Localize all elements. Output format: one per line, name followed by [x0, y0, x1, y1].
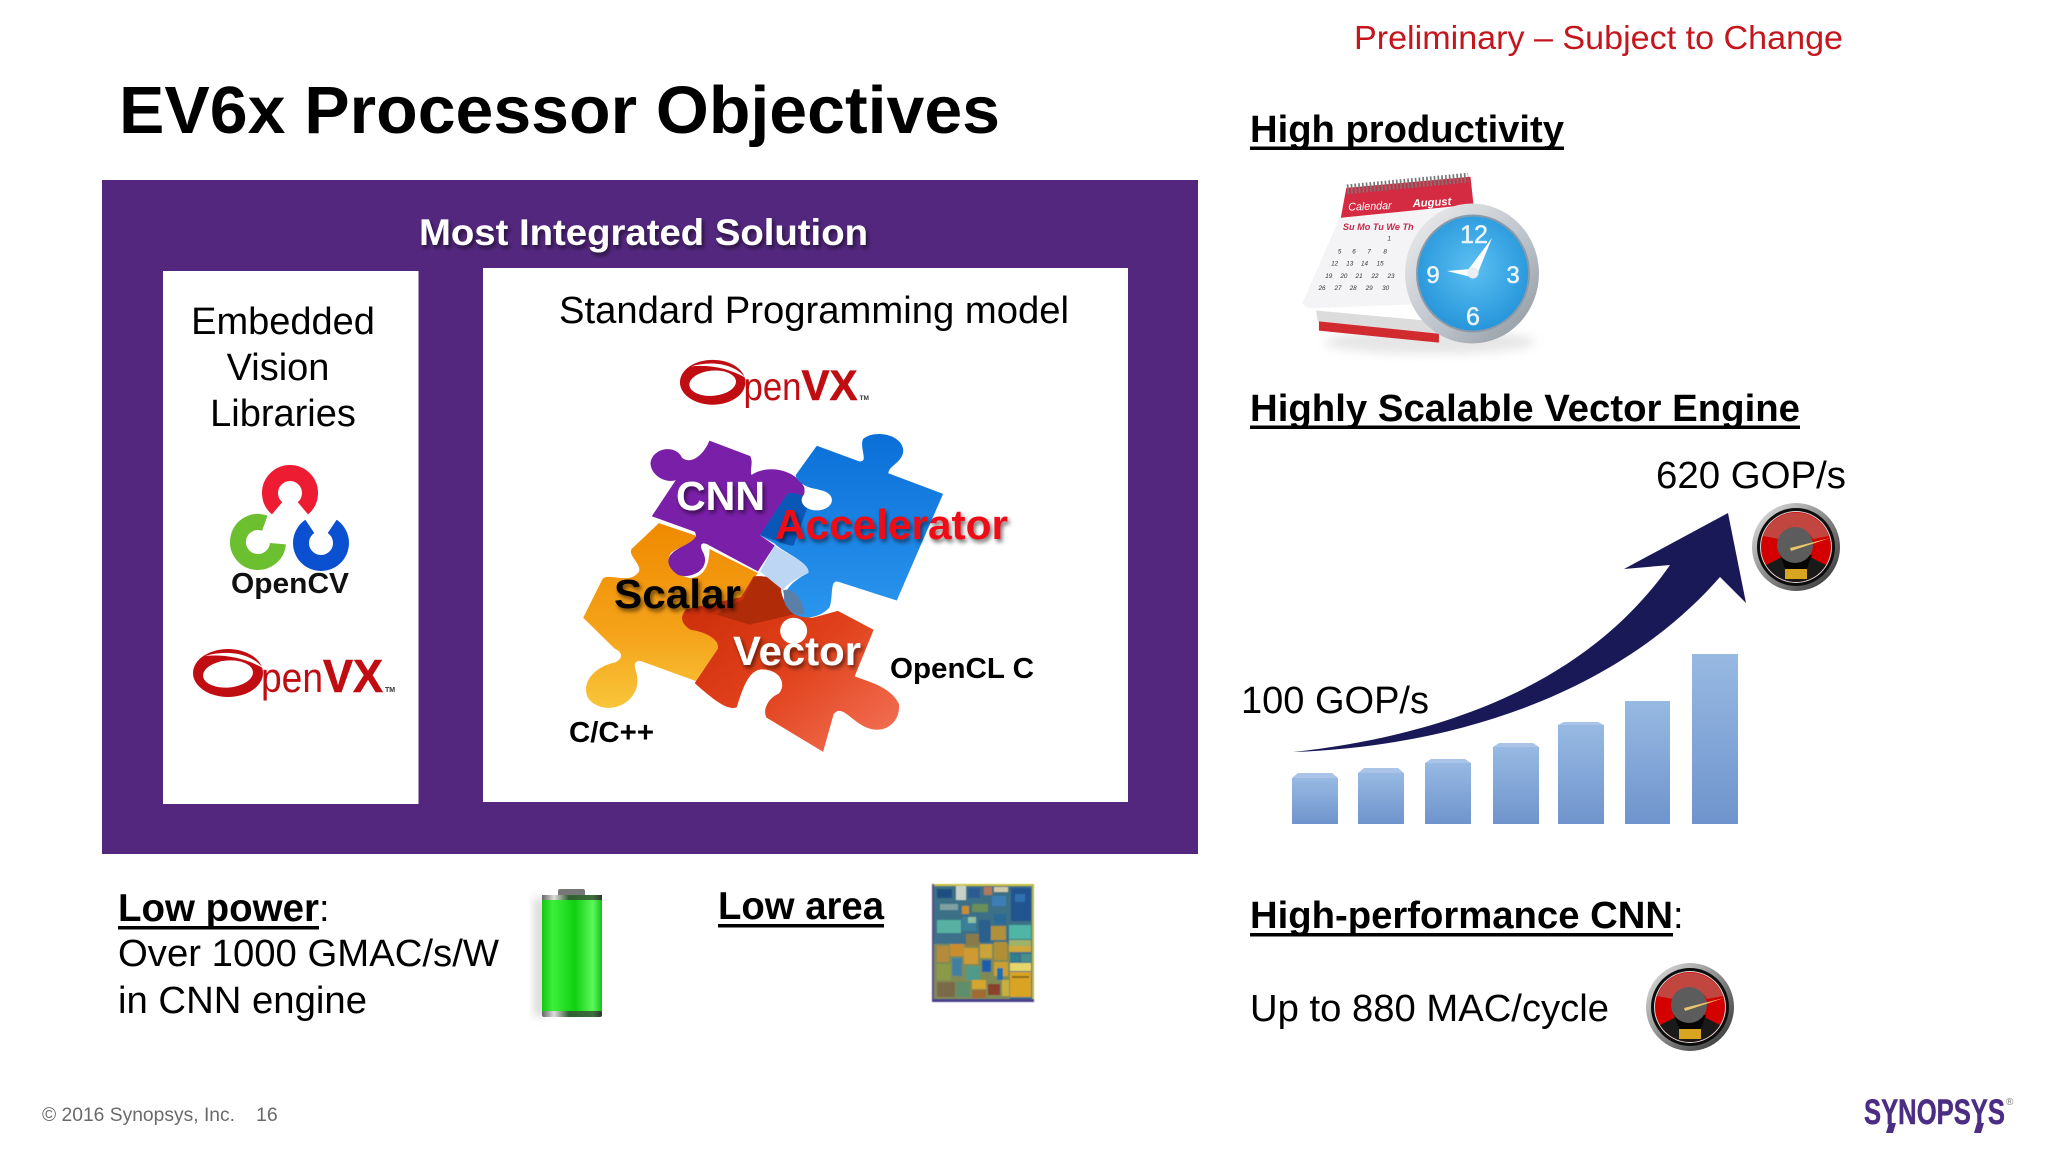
icon: calendar and clock: 29	[1365, 285, 1373, 292]
notice: preliminary: Preliminary – Subject to Change	[1354, 20, 1843, 57]
footer: copyright and page number: © 2016 Synopsys, Inc.	[42, 1104, 235, 1126]
puzzle piece: scalar	[583, 523, 758, 708]
icon: calendar and clock: 23	[1387, 273, 1395, 280]
panel: standard programming model	[483, 268, 1128, 802]
logo: OpenVX: TM	[385, 687, 395, 694]
label: 620 GOP/s: 620 GOP/s	[1656, 455, 1846, 497]
icon: calendar and clock: 8	[1383, 248, 1387, 256]
logo: OpenVX: VX	[802, 362, 858, 410]
text block: low power: Over 1000 GMAC/s/W	[118, 933, 499, 975]
text block: low power: :	[319, 888, 330, 930]
icon: calendar and clock	[1302, 177, 1539, 354]
label: C/C++: C/C++	[569, 717, 654, 749]
libraries heading: Embedded	[191, 301, 375, 343]
logo: OpenVX: pen	[744, 365, 802, 409]
heading: low area: Low area	[718, 885, 885, 928]
icon: calendar and clock: 26	[1318, 285, 1326, 292]
icon: calendar and clock: August	[1411, 196, 1452, 210]
label: Vector: Vector	[733, 628, 861, 674]
heading: high-performance CNN: :	[1673, 895, 1684, 937]
label: CNN: CNN	[676, 473, 765, 519]
arrow: growth curve	[1293, 513, 1746, 752]
icon: calendar and clock: 22	[1371, 273, 1379, 280]
libraries heading: Libraries	[210, 393, 356, 435]
icon: calendar and clock: 13	[1346, 260, 1354, 268]
icon: calendar and clock: 21	[1355, 273, 1363, 280]
libraries heading	[191, 301, 375, 435]
puzzle piece: cnn	[651, 441, 805, 576]
puzzle graphic	[583, 434, 943, 752]
icon: speedometer bottom	[1646, 963, 1734, 1051]
panel heading: Most Integrated Solution	[419, 212, 868, 253]
icon: calendar and clock: 1	[1388, 235, 1391, 243]
icon: calendar and clock: 7	[1367, 248, 1371, 256]
heading: highly scalable vector engine: Highly Scalable Vector Engine	[1250, 388, 1800, 430]
icon: calendar and clock: Su Mo Tu We Th	[1343, 222, 1414, 232]
icon: calendar and clock: 12	[1331, 260, 1339, 268]
logo: OpenVX	[680, 360, 869, 410]
text block: low power: Low power	[118, 887, 319, 930]
icon: calendar and clock: 9	[1426, 262, 1440, 289]
label: 100 GOP/s: 100 GOP/s	[1241, 680, 1429, 722]
puzzle piece: vector	[682, 576, 899, 752]
logo: OpenCV: OpenCV	[231, 568, 350, 600]
icon: chip die	[932, 884, 1034, 1002]
text: MAC per cycle: Up to 880 MAC/cycle	[1250, 988, 1609, 1030]
footer: copyright and page number: 16	[256, 1104, 278, 1126]
icon: calendar and clock: 28	[1349, 285, 1357, 292]
icon: calendar and clock: 15	[1377, 260, 1384, 268]
icon: calendar and clock: Calendar	[1348, 200, 1392, 214]
icon: calendar and clock: 19	[1325, 273, 1333, 280]
icon: calendar and clock: 5	[1338, 248, 1342, 256]
icon: calendar and clock: 14	[1361, 260, 1368, 268]
bar chart	[1292, 654, 1738, 824]
text block: low power	[118, 887, 499, 1022]
heading: high productivity: High productivity	[1250, 109, 1564, 151]
icon: calendar and clock: 12	[1460, 221, 1488, 249]
text block: low power: in CNN engine	[118, 980, 367, 1022]
icon: calendar and clock: 20	[1339, 273, 1348, 280]
libraries heading: Vision	[227, 347, 329, 389]
heading: high-performance CNN: High-performance CNN	[1250, 895, 1673, 937]
icon: battery	[535, 889, 602, 1017]
puzzle piece: accelerator	[760, 434, 943, 617]
label: Accelerator: Accelerator	[775, 501, 1008, 548]
icon: speedometer top	[1752, 503, 1840, 591]
icon: calendar and clock: 3	[1506, 262, 1520, 289]
label: Scalar: Scalar	[614, 571, 741, 617]
label: OpenCL C: OpenCL C	[890, 653, 1034, 685]
panel: most integrated solution	[102, 180, 1198, 854]
logo: OpenVX: VX	[323, 650, 383, 702]
panel: embedded vision libraries	[163, 271, 418, 804]
icon: calendar and clock: 27	[1334, 285, 1342, 292]
programming model heading: Standard Programming model	[559, 290, 1069, 332]
icon: calendar and clock: 6	[1466, 303, 1480, 331]
logo: OpenCV	[231, 473, 350, 600]
logo: OpenVX: TM	[859, 395, 869, 402]
logo: OpenVX: pen	[261, 654, 323, 701]
title: EV6x Processor Objectives	[119, 73, 1000, 148]
icon: calendar and clock: 30	[1382, 285, 1389, 292]
logo: OpenVX	[193, 649, 395, 702]
logo: Synopsys: ®	[2006, 1097, 2014, 1108]
icon: calendar and clock: 6	[1352, 248, 1356, 256]
